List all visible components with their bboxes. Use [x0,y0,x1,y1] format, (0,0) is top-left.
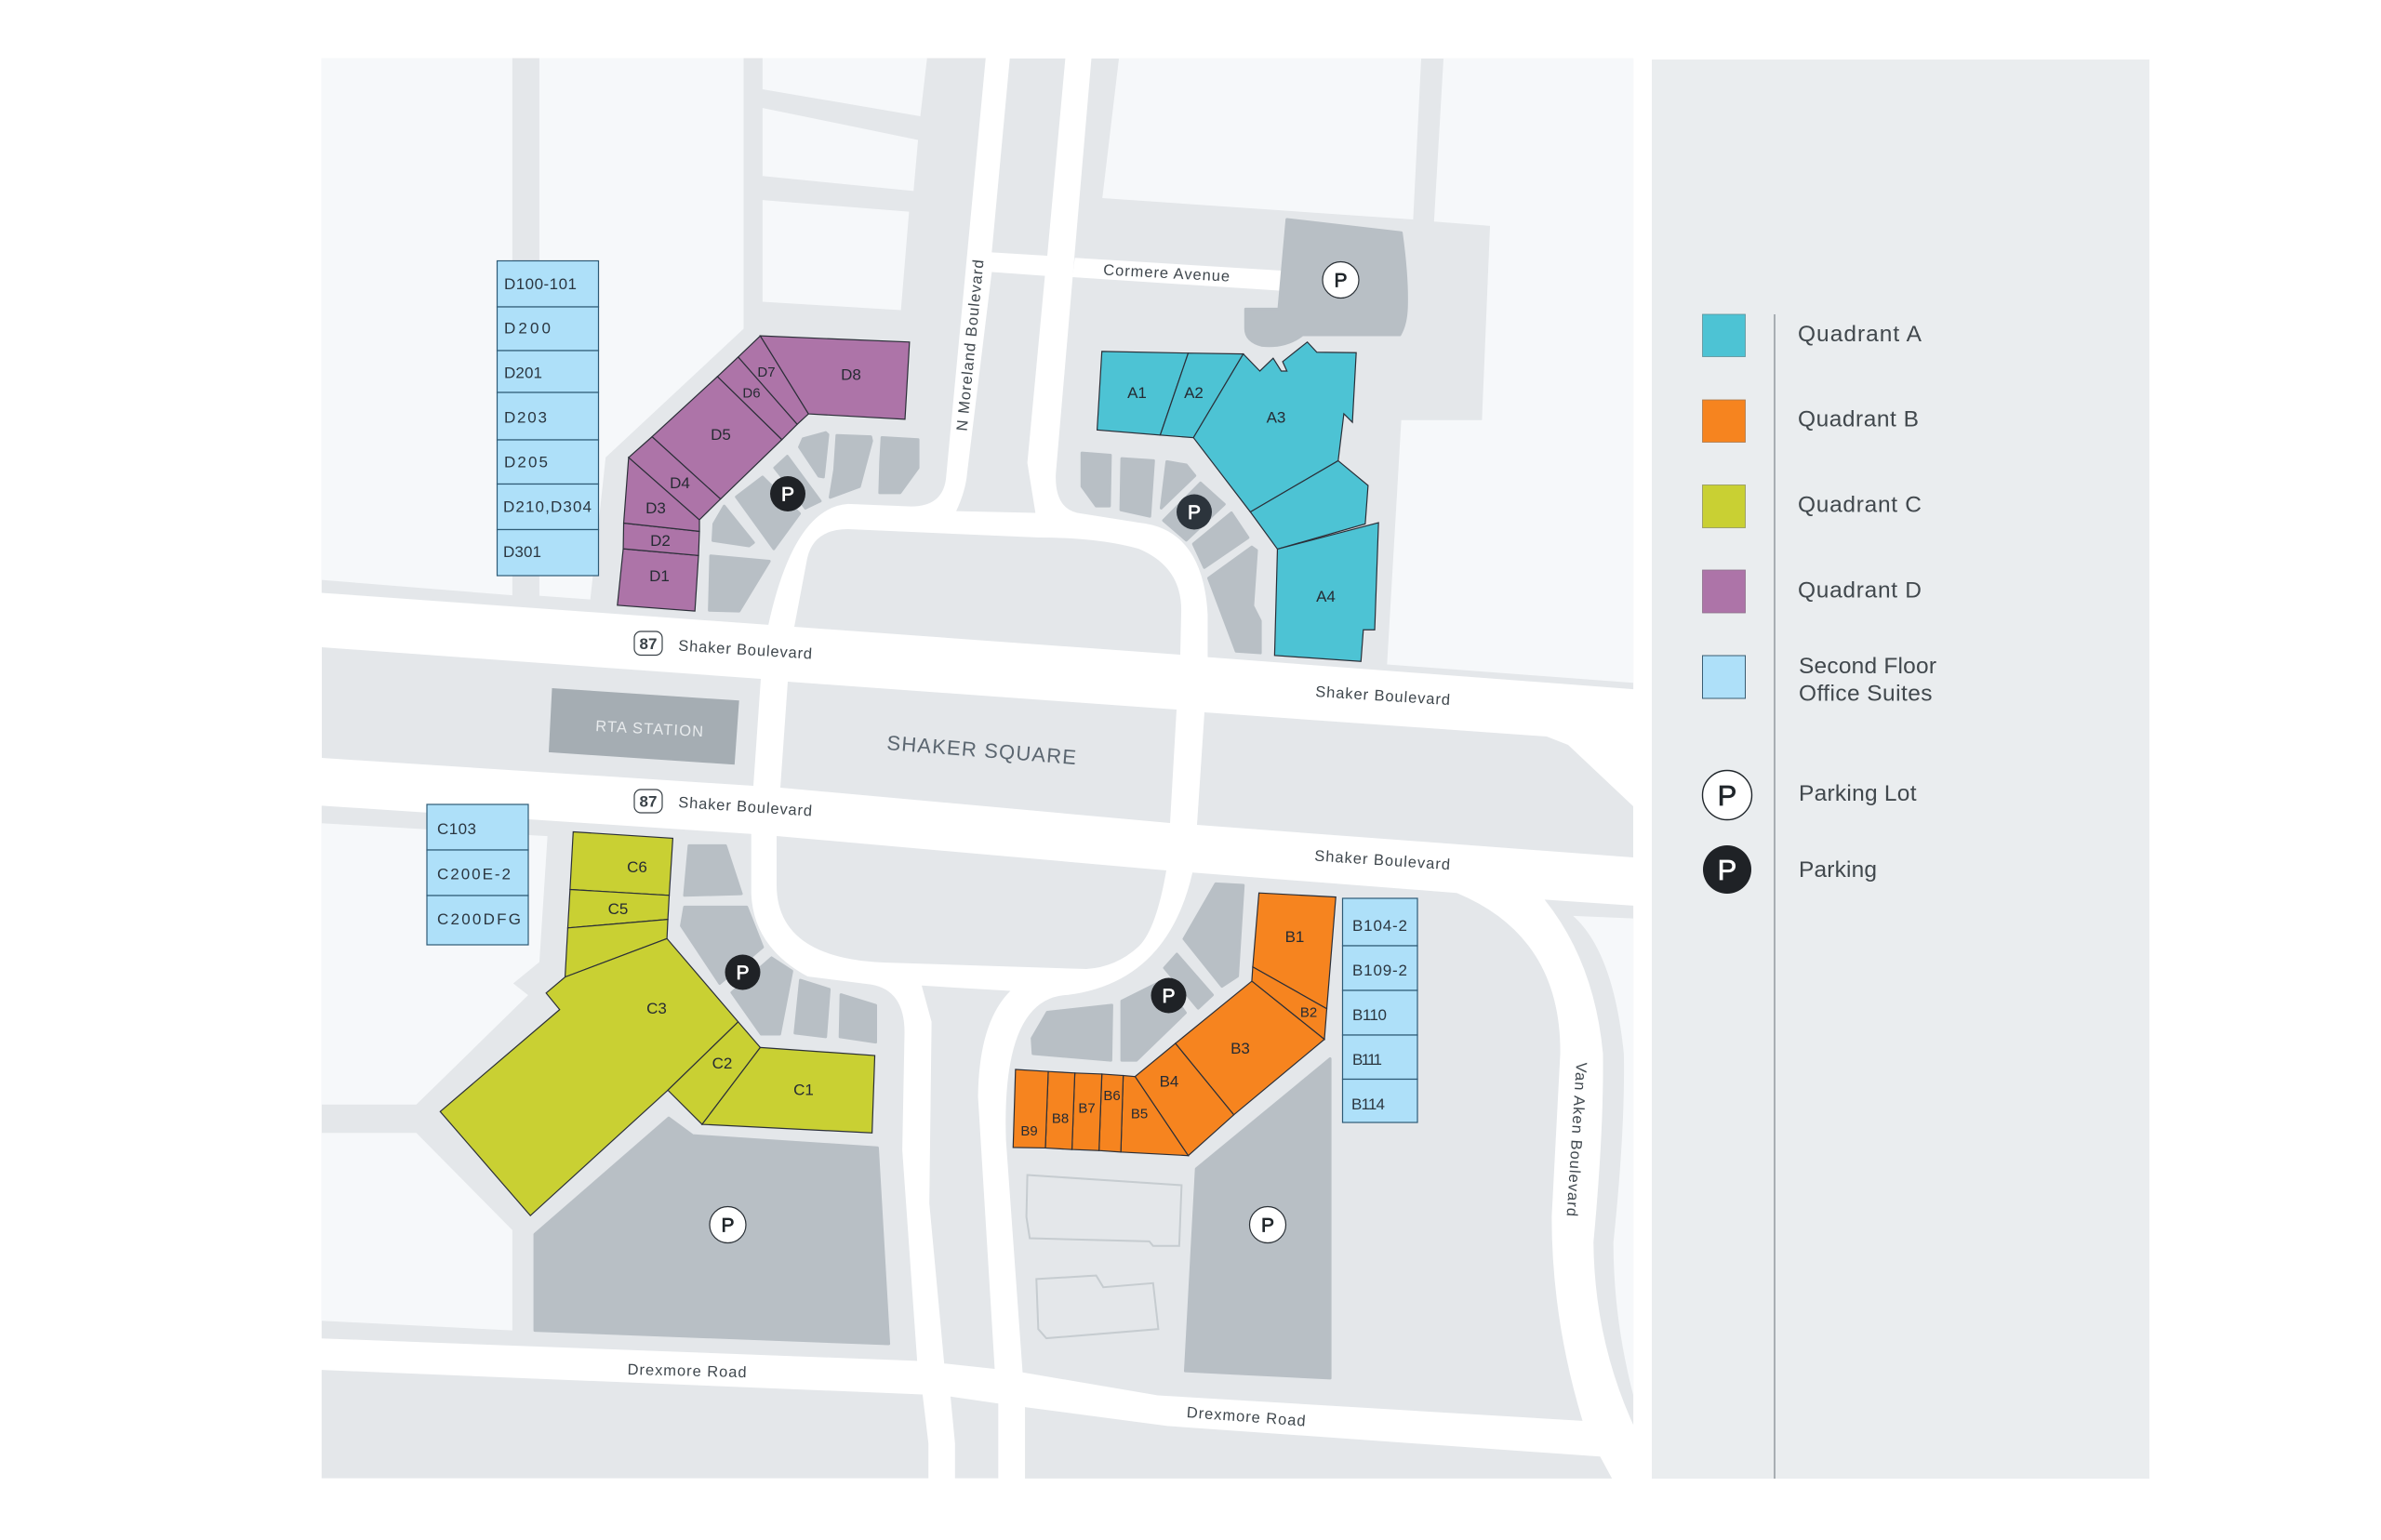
quadrant A units [1097,342,1378,661]
unit B8: B8 [1052,1110,1069,1127]
parking areas: northeast [1082,219,1406,653]
unit C2: C2 [712,1055,732,1072]
unit C3 [440,938,738,1215]
legend: Quadrant C [1702,485,1922,528]
unit B3: B3 [1230,1040,1250,1057]
legend: Quadrant A: Quadrant A [1798,322,1922,347]
parking marker: southwest [725,954,761,989]
unit D1 [618,549,698,611]
unit B5 [1121,1076,1189,1156]
unit D6 [717,357,797,440]
quadrant B units [1013,893,1336,1156]
unit A1: A1 [1127,384,1147,402]
legend: Second Floor Office Suites: Office Suites [1799,681,1933,707]
unit D7 [738,336,808,424]
parking marker: northeast: P [1188,502,1201,524]
unit B7: B7 [1078,1101,1096,1116]
second floor office suites: C block: C200E-2 [437,865,511,883]
second floor office suites: D block [497,260,599,576]
unit C1 [702,1047,875,1133]
unit D2: D2 [650,532,671,550]
legend panel [1652,60,2149,1479]
unit C5 [567,889,670,928]
unit A3: A3 [1267,409,1285,426]
second floor office suites: B block: B110 [1352,1006,1387,1024]
second floor office suites: D block: D100-101 [504,275,577,293]
legend: Parking [1703,845,1877,894]
unit B6: B6 [1103,1088,1121,1104]
quadrant C units [440,831,875,1215]
parking marker: southwest: P [736,962,750,984]
unit D3: D3 [645,499,666,517]
legend: Quadrant B: Quadrant B [1798,407,1919,431]
unit D7: D7 [757,365,776,380]
legend: Quadrant D [1702,570,1922,613]
unit B2: B2 [1300,1004,1317,1021]
unit C1: C1 [793,1081,814,1099]
parking lot marker: southeast: P [1261,1215,1274,1237]
legend: Second Floor Office Suites [1702,654,1936,707]
parking marker: northwest [770,476,805,511]
legend: Parking Lot: Parking Lot [1799,781,1917,806]
second floor office suites: C block: C103 [437,820,476,838]
unit B9 [1013,1069,1048,1148]
parking lot marker: southwest: P [721,1215,735,1237]
unit B1: B1 [1285,928,1304,946]
Shaker Square label: SHAKER SQUARE [886,731,1077,769]
unit C6: C6 [627,858,647,876]
unlabelled unit below C5 [565,920,668,977]
quadrant D units [618,336,910,611]
unit D8: D8 [841,366,861,383]
second floor office suites: C block: C200DFG [437,910,521,928]
second floor office suites: D block: D201 [504,365,542,381]
road label: Shaker Boulevard upper west with route 87 badge [634,631,813,663]
legend: Second Floor Office Suites: Second Floor [1799,654,1936,679]
unit D4 [629,437,721,520]
legend: Parking Lot: P [1718,779,1736,812]
parking lot marker: Cormere: P [1334,270,1348,292]
parking lot marker: southeast [1250,1207,1285,1242]
unit A3 [1193,342,1356,512]
parking marker: southeast [1151,978,1187,1014]
unit C3: C3 [646,1000,667,1017]
unlabelled unit between A3 and A4 [1250,460,1368,549]
unit B6 [1099,1074,1124,1152]
legend: Quadrant B [1702,400,1919,443]
unit D4: D4 [670,474,690,492]
legend: Quadrant D: Quadrant D [1798,578,1922,603]
unit D2 [623,523,699,555]
second floor office suites: B block: B114 [1351,1095,1385,1113]
road label: Shaker Boulevard upper east: Shaker Boulevard [1315,684,1451,709]
unit C5: C5 [608,900,628,918]
second floor office suites: C block [427,804,528,945]
central blocks between Shaker Boulevard [322,529,1633,969]
unit B2 [1252,967,1327,1040]
parking areas: southwest [535,845,889,1344]
legend: Parking: Parking [1799,857,1877,883]
second floor office suites: D block: D203 [504,409,547,426]
road label: Drexmore Road west: Drexmore Road [627,1361,747,1381]
legend: Quadrant C: Quadrant C [1798,493,1922,517]
outlined neighbouring buildings [1027,1175,1181,1338]
unit B9: B9 [1020,1123,1038,1139]
parking lot marker: southwest [710,1207,746,1242]
road label: Van Aken Boulevard: Van Aken Boulevard [1563,1062,1590,1217]
RTA station: RTA STATION [595,718,704,740]
second floor office suites: B block: B104-2 [1352,917,1407,935]
parking areas: northwest [710,432,918,611]
road label: N Moreland Boulevard: N Moreland Boulevard [954,259,988,431]
unit A1 [1097,352,1189,435]
parking marker: northeast [1177,495,1212,530]
parking marker: southeast: P [1162,986,1176,1007]
road label: Shaker Boulevard lower west with route 87 badge: 87 [640,792,657,811]
unit D3 [624,458,699,531]
unit B5: B5 [1131,1107,1148,1122]
unit A4: A4 [1316,588,1336,605]
unit C6 [570,831,672,896]
map base: blocks and roads [322,58,1634,1479]
unit B4: B4 [1160,1073,1178,1090]
road label: Drexmore Road east: Drexmore Road [1186,1404,1306,1430]
unit B3 [1176,981,1324,1115]
second floor office suites: D block: D301 [503,543,541,561]
road label: Shaker Boulevard lower west with route 87 badge [634,790,813,820]
unit A2: A2 [1184,384,1204,402]
unit D6: D6 [742,385,761,402]
second floor office suites: B block: B111 [1352,1051,1382,1069]
second floor office suites: D block: D210,D304 [503,498,592,515]
parking areas: southeast [1032,883,1330,1378]
legend: Parking Lot [1702,770,1917,820]
unit C2 [668,1022,760,1124]
parking lot marker: Cormere [1323,262,1359,298]
unit A4 [1274,523,1378,661]
road label: Shaker Boulevard upper west with route 87 badge: 87 [640,635,657,653]
unit B8 [1045,1071,1075,1149]
second floor office suites: B block: B109-2 [1352,962,1407,979]
unit B4 [1135,1043,1234,1156]
unit B1 [1253,893,1336,1009]
unit A2 [1160,353,1244,438]
parking marker: northwest: P [781,484,794,506]
legend: Parking: P [1718,854,1736,886]
road label: Cormere Avenue: Cormere Avenue [1103,262,1230,285]
second floor office suites: B block [1343,898,1417,1122]
road label: Shaker Boulevard lower west with route 87 badge: Shaker Boulevard [678,794,813,820]
unit D5: D5 [711,426,731,444]
unit D1: D1 [649,567,670,585]
road label: Shaker Boulevard lower east: Shaker Boulevard [1314,848,1451,873]
RTA station [549,688,739,764]
legend: Quadrant A [1702,314,1922,357]
second floor office suites: D block: D205 [504,454,548,471]
road label: Shaker Boulevard upper west with route 87 badge: Shaker Boulevard [678,638,813,663]
unit B7 [1072,1073,1102,1150]
unit D8 [760,336,910,419]
second floor office suites: D block: D200 [504,320,551,337]
unit D5 [652,377,782,499]
